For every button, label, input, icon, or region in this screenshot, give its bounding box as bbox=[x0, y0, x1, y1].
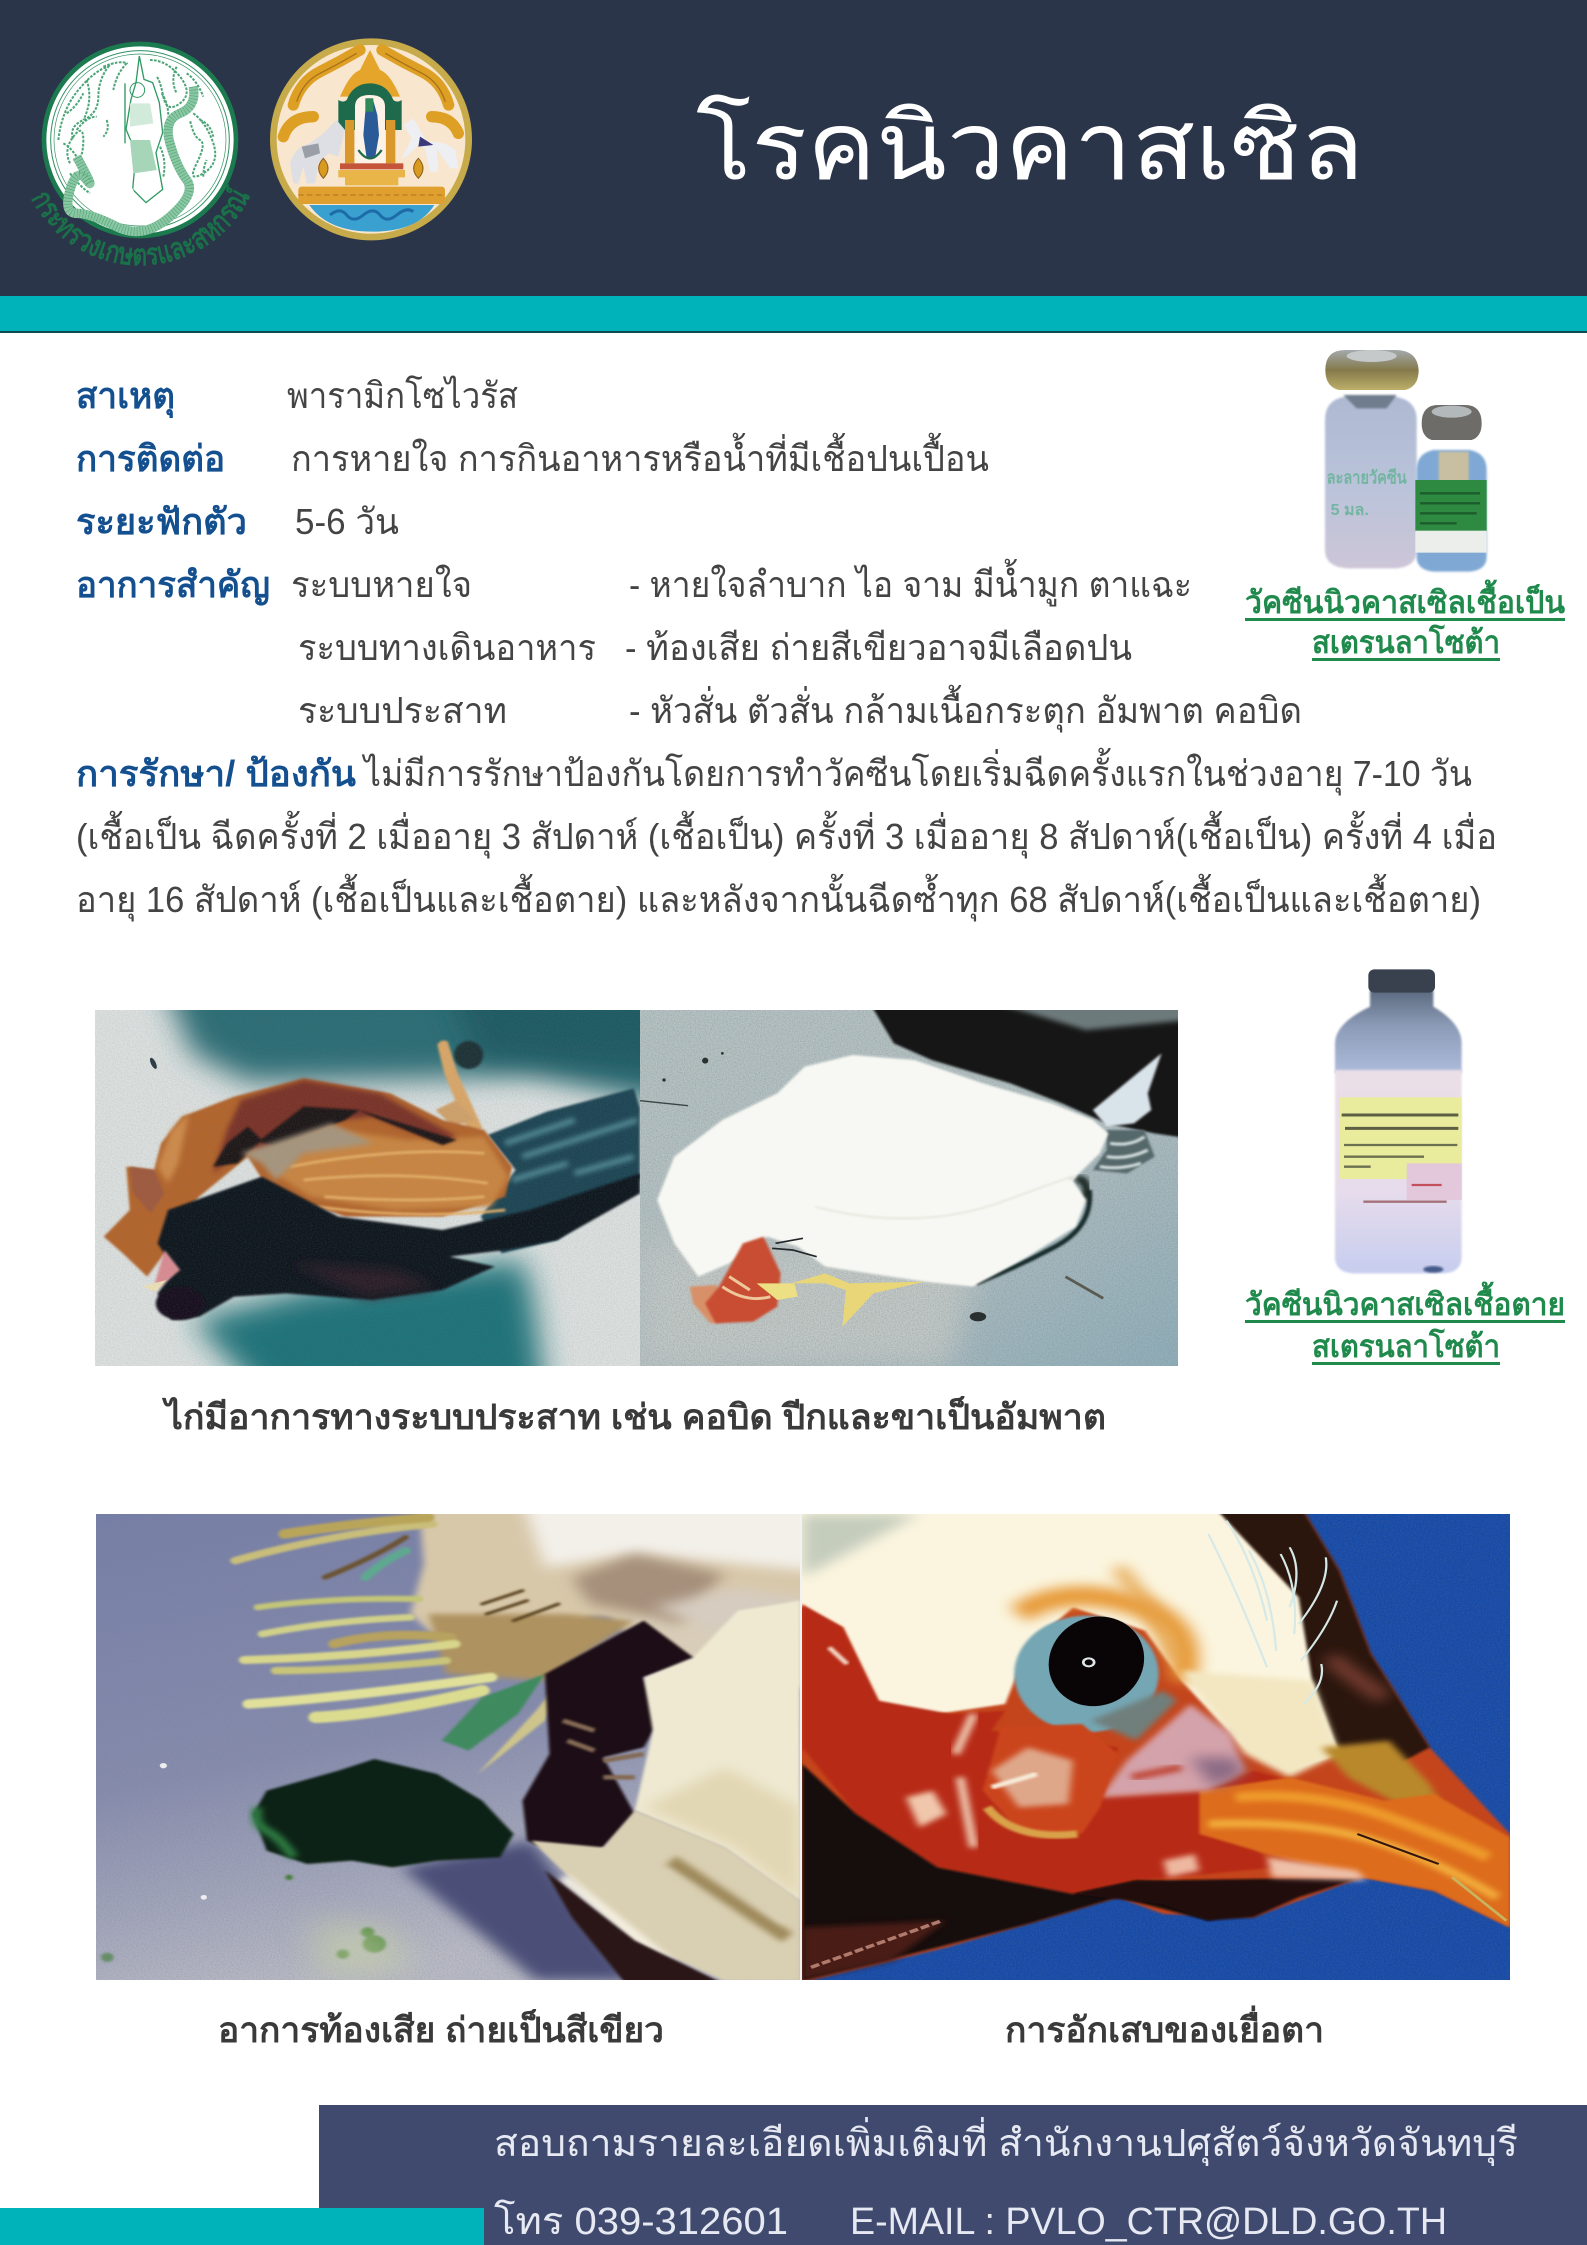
logo caption: ministry name on arc: กระทรวงเกษตรและสหกรณ์ bbox=[31, 183, 250, 266]
title: โรคนิวคาสเซิล bbox=[696, 94, 1364, 199]
divider between diarrhea and eye photos bbox=[800, 1514, 802, 1980]
treatment text line 3: อายุ 16 สัปดาห์ (เชื้อเป็นและเชื้อตาย) และหลังจากนั้นฉีดซ้ำทุก 68 สัปดาห์(เชื้อเป็นและเชื้อตาย) bbox=[76, 873, 1481, 922]
caption: killed vaccine: สเตรนลาโซต้า bbox=[1312, 1328, 1500, 1364]
value: transmission: การหายใจ การกินอาหารหรือน้ำที่มีเชื้อปนเปื้อน bbox=[291, 432, 989, 479]
symptom system: digestive: ระบบทางเดินอาหาร bbox=[298, 627, 596, 668]
label: transmission: การติดต่อ bbox=[76, 438, 225, 479]
caption: killed vaccine bbox=[1245, 1281, 1565, 1365]
treatment text line 1: ไม่มีการรักษาป้องกันโดยการทำวัคซีนโดยเริ่มฉีดครั้งแรกในช่วงอายุ 7-10 วัน bbox=[361, 747, 1472, 796]
teal stripe bbox=[0, 296, 1587, 332]
header band bbox=[0, 0, 1587, 296]
symptom system: nervous: ระบบประสาท bbox=[298, 690, 507, 731]
caption: killed vaccine: วัคซีนนิวคาสเซิลเชื้อตาย bbox=[1245, 1281, 1565, 1322]
photo: white chicken with twisted neck bbox=[640, 1010, 1178, 1366]
logo: department of livestock seal bbox=[270, 38, 472, 240]
treatment text line 2: (เชื้อเป็น ฉีดครั้งที่ 2 เมื่ออายุ 3 สัปดาห์ (เชื้อเป็น) ครั้งที่ 3 เมื่ออายุ 8 สัปดาห์(เชื้อเป็น) ครั้งที่ 4 เมื่อ bbox=[76, 810, 1497, 859]
info block: disease facts bbox=[76, 375, 1497, 922]
teal footer accent bbox=[0, 2208, 484, 2245]
symptom detail: respiratory: - หายใจลำบาก ไอ จาม มีน้ำมูก ตาแฉะ bbox=[629, 558, 1192, 607]
label: incubation: ระยะฟักตัว bbox=[76, 501, 247, 542]
caption: live vaccine: สเตรนลาโซต้า bbox=[1312, 624, 1500, 660]
contact phone: โทร 039-312601 bbox=[494, 2199, 788, 2243]
photo: green diarrhea bbox=[96, 1514, 892, 1980]
caption: rooster and chicken photos: ไก่มีอาการทางระบบประสาท เช่น คอบิด ปีกและขาเป็นอัมพาต bbox=[161, 1395, 1106, 1437]
label: treatment and prevention: การรักษา/ ป้องกัน bbox=[76, 753, 356, 794]
caption: live vaccine bbox=[1245, 579, 1565, 661]
symptom detail: digestive: - ท้องเสีย ถ่ายสีเขียวอาจมีเลือดปน bbox=[625, 627, 1132, 668]
contact line 1: สอบถามรายละเอียดเพิ่มเติมที่ สำนักงานปศุสัตว์จังหวัดจันทบุรี bbox=[494, 2117, 1518, 2166]
photo: rooster with neurological signs bbox=[95, 1010, 640, 1366]
image: killed vaccine bottle bbox=[1334, 969, 1463, 1274]
image: live vaccine vials: 5 มล. bbox=[1331, 502, 1369, 519]
value: cause: พารามิกโซไวรัส bbox=[287, 375, 518, 416]
logo: ministry of agriculture seal bbox=[42, 42, 238, 238]
image: live vaccine vials: ละลายวัคซีน bbox=[1327, 467, 1407, 487]
contact email: E-MAIL : PVLO_CTR@DLD.GO.TH bbox=[850, 2201, 1447, 2243]
caption: eye photo: การอักเสบของเยื่อตา bbox=[1005, 2005, 1324, 2050]
photo: inflamed conjunctiva bbox=[802, 1514, 1510, 1980]
caption: live vaccine: วัคซีนนิวคาสเซิลเชื้อเป็น bbox=[1245, 579, 1565, 620]
label: key symptoms: อาการสำคัญ bbox=[76, 564, 270, 606]
caption: diarrhea photo: อาการท้องเสีย ถ่ายเป็นสีเขียว bbox=[218, 2008, 664, 2050]
label: cause: สาเหตุ bbox=[76, 375, 175, 419]
image: live vaccine vials bbox=[1324, 350, 1488, 574]
value: incubation: 5-6 วัน bbox=[295, 501, 399, 542]
footer contact panel bbox=[0, 2105, 1587, 2245]
symptom system: respiratory: ระบบหายใจ bbox=[291, 564, 472, 605]
symptom detail: nervous: - หัวสั่น ตัวสั่น กล้ามเนื้อกระตุก อัมพาต คอบิด bbox=[629, 684, 1302, 733]
